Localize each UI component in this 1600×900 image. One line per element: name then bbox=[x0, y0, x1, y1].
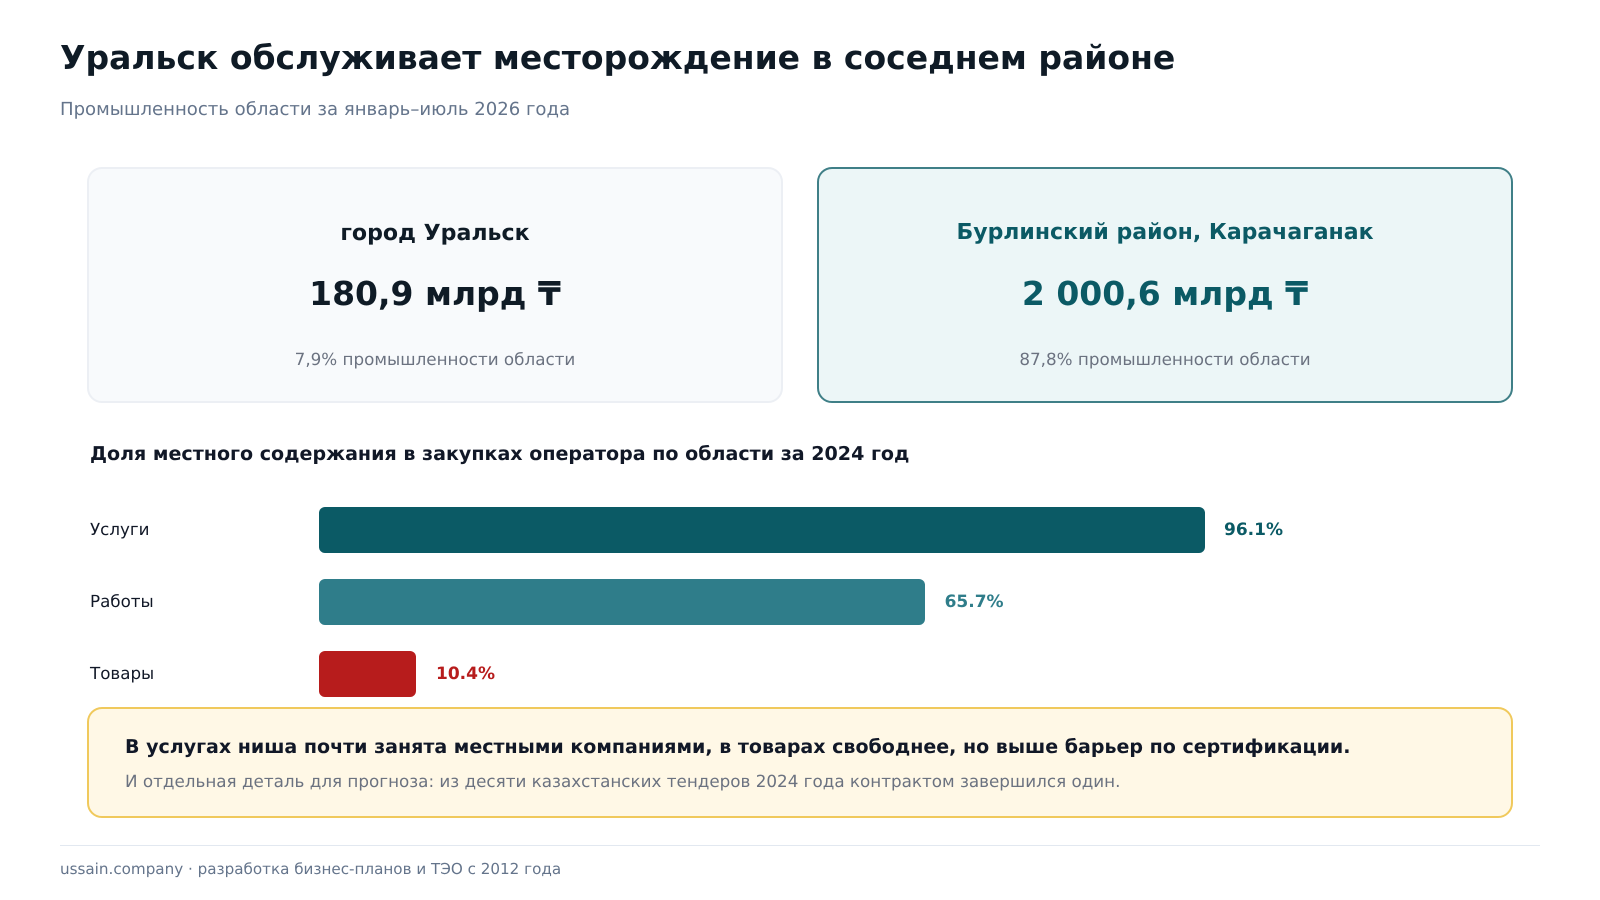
row label: Товары: Товары bbox=[90, 663, 154, 683]
bar: Товары bbox=[319, 651, 416, 697]
card heading: город Уральск: город Уральск bbox=[340, 220, 530, 246]
card note: Бурлинский район: 87,8% промышленности области bbox=[1019, 349, 1311, 369]
value: Услуги: 96.1% bbox=[1224, 520, 1283, 540]
bar: Услуги bbox=[319, 507, 1205, 553]
card value: Бурлинский район: 2 000,6 млрд ₸ bbox=[1022, 274, 1308, 313]
callout secondary text: И отдельная деталь для прогноза: из десяти казахстанских тендеров 2024 года контрактом завершился один. bbox=[125, 771, 1120, 791]
title: Уральск обслуживает месторождение в соседнем районе bbox=[60, 38, 1175, 77]
row label: Услуги: Услуги bbox=[90, 519, 150, 539]
callout bbox=[87, 707, 1513, 818]
footer: ussain.company · разработка бизнес-планов и ТЭО с 2012 года bbox=[60, 860, 561, 878]
callout main text: В услугах ниша почти занята местными компаниями, в товарах свободнее, но выше барьер по сертификации. bbox=[125, 736, 1350, 758]
value: Товары: 10.4% bbox=[436, 664, 495, 684]
card heading: Бурлинский район: Бурлинский район, Карачаганак bbox=[956, 220, 1374, 245]
bar chart bbox=[90, 507, 1283, 697]
card value: Уральск: 180,9 млрд ₸ bbox=[309, 274, 561, 313]
card note: Уральск: 7,9% промышленности области bbox=[295, 349, 575, 369]
subtitle: Промышленность области за январь–июль 2026 года bbox=[60, 99, 570, 120]
value: Работы: 65.7% bbox=[945, 592, 1004, 612]
panel: город Уральск bbox=[87, 167, 783, 403]
chart heading: Доля местного содержания в закупках оператора по области за 2024 год bbox=[90, 443, 909, 465]
bar: Работы bbox=[319, 579, 925, 625]
row label: Работы: Работы bbox=[90, 591, 154, 611]
panel: Бурлинский район bbox=[817, 167, 1513, 403]
